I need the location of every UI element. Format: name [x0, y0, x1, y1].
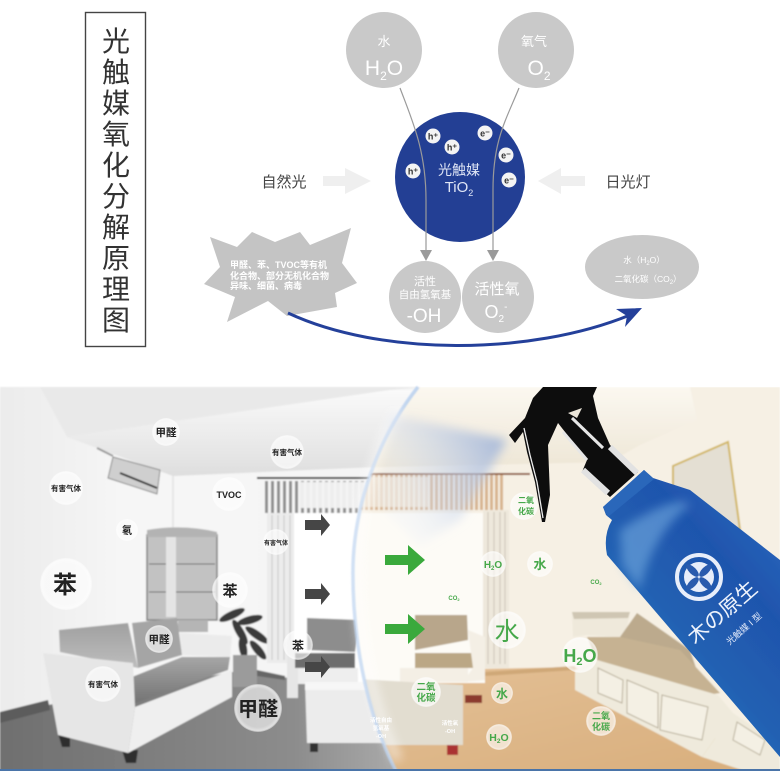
clean product bubbles: H	[489, 732, 497, 744]
faded table captions: -OH	[376, 734, 386, 740]
catalyst circle: h⁺	[428, 132, 438, 142]
sofa seat	[132, 657, 230, 703]
side curtain	[483, 510, 509, 668]
products ellipse: 2	[646, 261, 650, 267]
floor	[384, 667, 741, 769]
sofa legs	[58, 733, 138, 763]
arrow: water to hydroxyl	[400, 88, 432, 261]
clean product bubbles: 化碳	[416, 692, 436, 704]
window	[340, 513, 485, 683]
catalyst circle: TiO	[445, 179, 468, 196]
title box	[86, 12, 146, 346]
clean product bubbles	[411, 492, 616, 750]
pollutant bubbles: TVOC	[216, 490, 242, 500]
sofa cushions	[59, 623, 138, 668]
catalyst circle: 光触媒	[438, 162, 480, 178]
pollutant bubbles: 苯	[53, 572, 77, 599]
title box: 光	[102, 26, 130, 57]
arrow: natural light	[323, 168, 371, 194]
product type: 光触媒 I 型	[724, 610, 764, 647]
title box: 化	[102, 150, 130, 181]
clean product bubbles: O	[494, 560, 502, 571]
colour room	[340, 387, 780, 771]
clean product bubbles: 二氧	[518, 495, 534, 505]
monochrome room	[0, 387, 430, 771]
products ellipse: 二氧化碳（CO	[614, 274, 670, 284]
hydroxyl circle: -OH	[407, 306, 441, 327]
armchair	[307, 618, 360, 652]
skirting	[0, 700, 50, 723]
clean product bubbles: 二氧	[592, 710, 610, 721]
superoxide circle: 2	[499, 314, 505, 325]
pollutant bubbles: 有害气体	[51, 483, 81, 493]
pollutant bubbles: 有害气体	[88, 679, 118, 689]
clean product bubbles: 2	[576, 656, 583, 668]
oxygen circle: 氧气	[521, 34, 547, 49]
window	[293, 513, 423, 683]
title box: 媒	[102, 88, 130, 119]
catalyst circle: e⁻	[480, 128, 490, 138]
pollutant bubbles: 甲醛	[156, 426, 177, 439]
title box: 理	[102, 274, 130, 305]
lens glow	[353, 387, 418, 771]
bottle	[603, 470, 780, 757]
water circle: 2	[380, 69, 387, 83]
brand name: 木の原生	[683, 577, 762, 649]
label: natural light: 自然光	[261, 174, 307, 191]
catalyst circle: h⁺	[447, 142, 457, 152]
hydroxyl circle: 自由氢氧基	[399, 288, 452, 301]
catalyst circle: 2	[468, 188, 473, 198]
bench cabinet	[574, 662, 716, 758]
products ellipse: O）	[650, 255, 665, 265]
catalyst circle	[395, 112, 525, 242]
products ellipse: ）	[673, 274, 682, 284]
water circle: O	[387, 57, 403, 80]
clean product bubbles: O	[501, 732, 509, 744]
superoxide circle: 活性氧	[474, 281, 520, 298]
pollutant bubbles	[40, 418, 313, 732]
title box: 原	[102, 243, 130, 274]
clean product bubbles: 水	[494, 618, 520, 646]
clean product bubbles: H	[484, 560, 491, 571]
logo	[675, 553, 723, 601]
floor	[0, 672, 420, 771]
coffee table	[305, 682, 430, 743]
spray head	[509, 387, 638, 522]
clean product bubbles: 2	[457, 597, 460, 602]
clean product bubbles: 2	[497, 738, 501, 745]
clean product bubbles: 水	[533, 557, 547, 572]
pollutant bubbles: 苯	[222, 583, 238, 600]
products ellipse: 2	[670, 280, 674, 286]
water circle	[346, 12, 422, 88]
catalyst circle: e⁻	[501, 150, 511, 160]
sofa right arm	[180, 633, 232, 657]
faded table captions: 活性自由	[370, 716, 392, 724]
catalyst circle: e⁻	[504, 176, 514, 186]
clean product bubbles: 化碳	[518, 506, 534, 516]
pollutant bubbles: 苯	[292, 638, 304, 653]
bench drawers	[574, 619, 628, 636]
title box: 分	[102, 181, 130, 212]
bottom edge	[0, 769, 780, 771]
curtain valance	[265, 481, 425, 513]
grey arrows	[305, 514, 330, 678]
bench seat	[587, 637, 720, 695]
title box: 触	[102, 57, 130, 88]
clean product bubbles: 2	[491, 566, 495, 572]
cabinet	[147, 535, 217, 620]
water circle: 水	[377, 34, 391, 49]
pollutants burst: 化合物、部分无机化合物	[230, 270, 329, 281]
sofa body	[128, 670, 232, 753]
oxygen circle: O	[527, 57, 544, 80]
superoxide circle: -	[504, 302, 507, 313]
arrow: oxygen to superoxide	[487, 88, 519, 261]
pollutant bubbles: 氡	[122, 524, 132, 537]
products ellipse: 水（H	[623, 255, 646, 265]
curtain valance	[345, 474, 503, 510]
clean product bubbles: 化碳	[592, 721, 610, 732]
superoxide circle: O	[485, 302, 499, 322]
bottle highlight	[620, 502, 690, 590]
pollutant bubbles: 甲醛	[238, 698, 278, 721]
clean product bubbles: CO	[448, 596, 457, 602]
faded table captions	[370, 716, 459, 740]
spray cone	[376, 415, 507, 545]
picture	[673, 442, 740, 530]
water circle: H	[365, 57, 380, 80]
plant	[218, 605, 271, 662]
products ellipse	[585, 235, 699, 299]
pollutants burst	[204, 228, 357, 322]
bench cushion	[620, 612, 696, 667]
pollutant bubbles: 甲醛	[148, 633, 170, 646]
title box: 解	[102, 212, 130, 243]
faded table captions: 活性氧	[442, 719, 459, 727]
clean product bubbles: CO	[590, 580, 599, 586]
arrow: daylight lamp	[538, 168, 585, 194]
pollutant bubbles: 有害气体	[272, 447, 302, 457]
hydroxyl circle	[389, 261, 461, 333]
clean product bubbles: 二氧	[416, 681, 436, 693]
faded table captions: 氢氧基	[373, 724, 390, 732]
clean product bubbles: H	[563, 646, 576, 666]
clean product bubbles: O	[583, 646, 597, 666]
side curtain	[267, 513, 294, 663]
oxygen circle	[498, 12, 574, 88]
pollutants burst: 甲醛、苯、TVOC等有机	[230, 259, 327, 270]
clean product bubbles: 2	[599, 581, 602, 586]
oxygen circle: 2	[544, 69, 551, 83]
faded table captions: -OH	[445, 729, 455, 735]
armchair	[415, 615, 468, 650]
title box: 氧	[102, 119, 130, 150]
reaction diagram	[204, 12, 699, 346]
clean product bubbles: 水	[496, 686, 508, 701]
label: daylight lamp: 日光灯	[605, 174, 651, 191]
room photo	[0, 387, 780, 771]
arrow: pollutants to products	[288, 308, 642, 346]
green arrows	[385, 545, 425, 644]
pollutants burst: 异味、细菌、病毒	[230, 280, 302, 291]
air conditioner	[108, 457, 160, 494]
title box: 图	[102, 305, 130, 336]
hydroxyl circle: 活性	[414, 274, 436, 288]
superoxide circle	[462, 261, 534, 333]
coffee table	[366, 679, 464, 746]
catalyst circle: h⁺	[408, 166, 418, 176]
pollutant bubbles: 有害气体	[264, 539, 288, 547]
